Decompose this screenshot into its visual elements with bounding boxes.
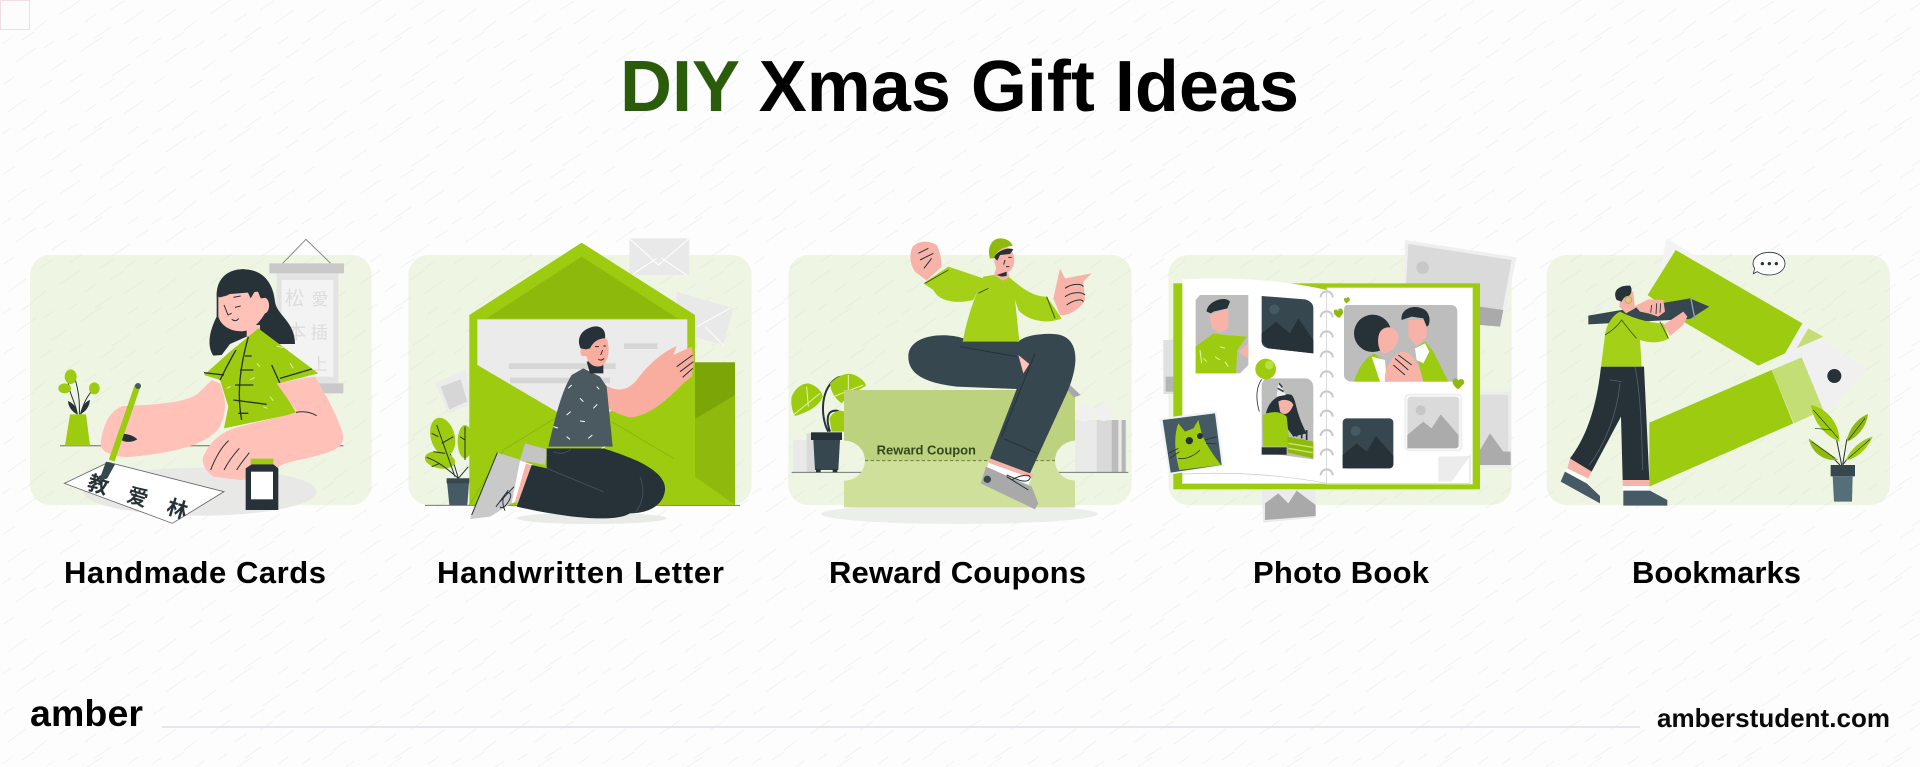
footer website: amberstudent.com (1657, 703, 1890, 733)
illustration: man sitting on coupon: Reward Coupon (877, 442, 976, 457)
illustration: woman doing calligraphy: 教 爱 林 (85, 471, 191, 524)
label: reward coupons: Reward Coupons (829, 555, 1086, 590)
label: handmade cards: Handmade Cards (64, 555, 326, 590)
label: handwritten letter: Handwritten Letter (437, 555, 724, 590)
panel: reward coupons (788, 238, 1132, 524)
title: DIY Xmas Gift Ideas (620, 47, 1299, 127)
panel: handmade cards (30, 239, 372, 524)
illustration: woman doing calligraphy: 本 (287, 321, 306, 343)
illustration: woman doing calligraphy: 愛 (312, 290, 328, 309)
panel: bookmarks (1547, 238, 1890, 506)
label: photo book: Photo Book (1253, 555, 1430, 590)
label: bookmarks: Bookmarks (1632, 555, 1801, 590)
panel: photo book (1159, 240, 1517, 523)
footer logo: amber: amber (30, 692, 143, 734)
illustration: man carrying giant pencil (1547, 238, 1890, 506)
illustration: man sitting on coupon (788, 238, 1132, 524)
illustration: woman doing calligraphy: 松 (285, 288, 304, 310)
illustration: woman doing calligraphy (30, 239, 372, 524)
panel: handwritten letter (408, 238, 752, 524)
speech bubble (1753, 252, 1785, 275)
illustration: woman doing calligraphy: 上 (311, 354, 328, 374)
illustration: open photo album (1159, 240, 1517, 523)
illustration: woman doing calligraphy: 插 (311, 322, 328, 342)
illustration: man with giant envelope (408, 238, 752, 524)
